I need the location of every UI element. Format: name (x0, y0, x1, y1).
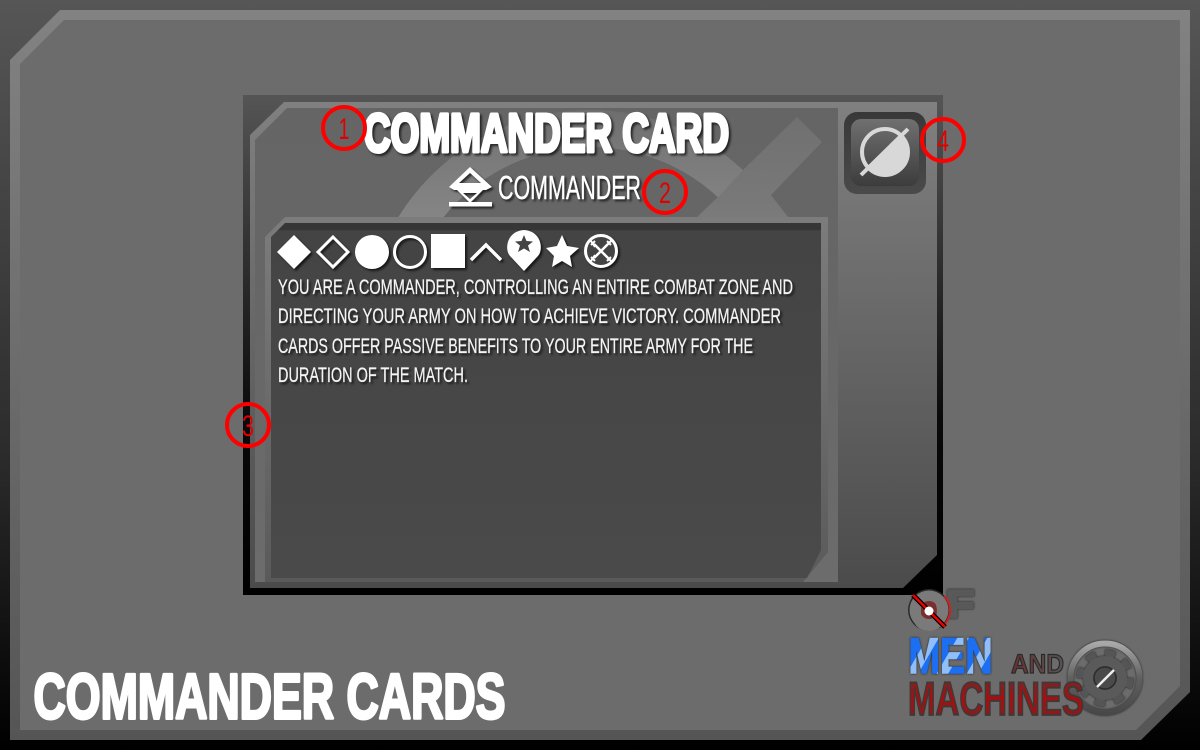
card body (250, 102, 937, 588)
logo (908, 583, 1140, 725)
icon: commander type (449, 167, 492, 206)
body text: DURATION OF THE MATCH. (278, 364, 468, 387)
body text: DIRECTING YOUR ARMY ON HOW TO ACHIEVE VICTORY. COMMANDER (278, 305, 781, 328)
callout 2: 2 (659, 177, 671, 210)
logo word: and: AND (1011, 649, 1064, 679)
callout 4 (922, 119, 964, 161)
logo word: of: F (946, 584, 974, 626)
callout 3 (227, 404, 269, 446)
logo word: men: MEN (908, 628, 992, 684)
logo word: of: O (911, 583, 947, 641)
callout 4: 4 (937, 125, 949, 158)
watermark emblem (398, 110, 822, 217)
callout 1: 1 (338, 113, 350, 146)
callout 1 (323, 107, 365, 149)
card type label: COMMANDER (498, 169, 641, 206)
card inner panel (255, 108, 838, 582)
body text: YOU ARE A COMMANDER, CONTROLLING AN ENTIRE COMBAT ZONE AND (278, 276, 793, 299)
text box frame (265, 217, 828, 582)
logo word: machines: MACHINES (908, 672, 1084, 725)
logo word: of (908, 583, 974, 641)
body text: CARDS OFFER PASSIVE BENEFITS TO YOUR ENTIRE ARMY FOR THE (278, 335, 753, 358)
page heading: COMMANDER CARDS (34, 660, 506, 732)
body text (278, 276, 793, 387)
icon: card cost button (844, 112, 926, 194)
callout 3: 3 (242, 410, 254, 443)
icon row: symbols (277, 230, 616, 271)
title: COMMANDER CARD (364, 104, 729, 164)
panel: commander card (243, 95, 943, 595)
text box (271, 223, 821, 578)
callout 2 (644, 171, 686, 213)
card outer frame (243, 95, 943, 595)
logo gear (1070, 644, 1140, 712)
